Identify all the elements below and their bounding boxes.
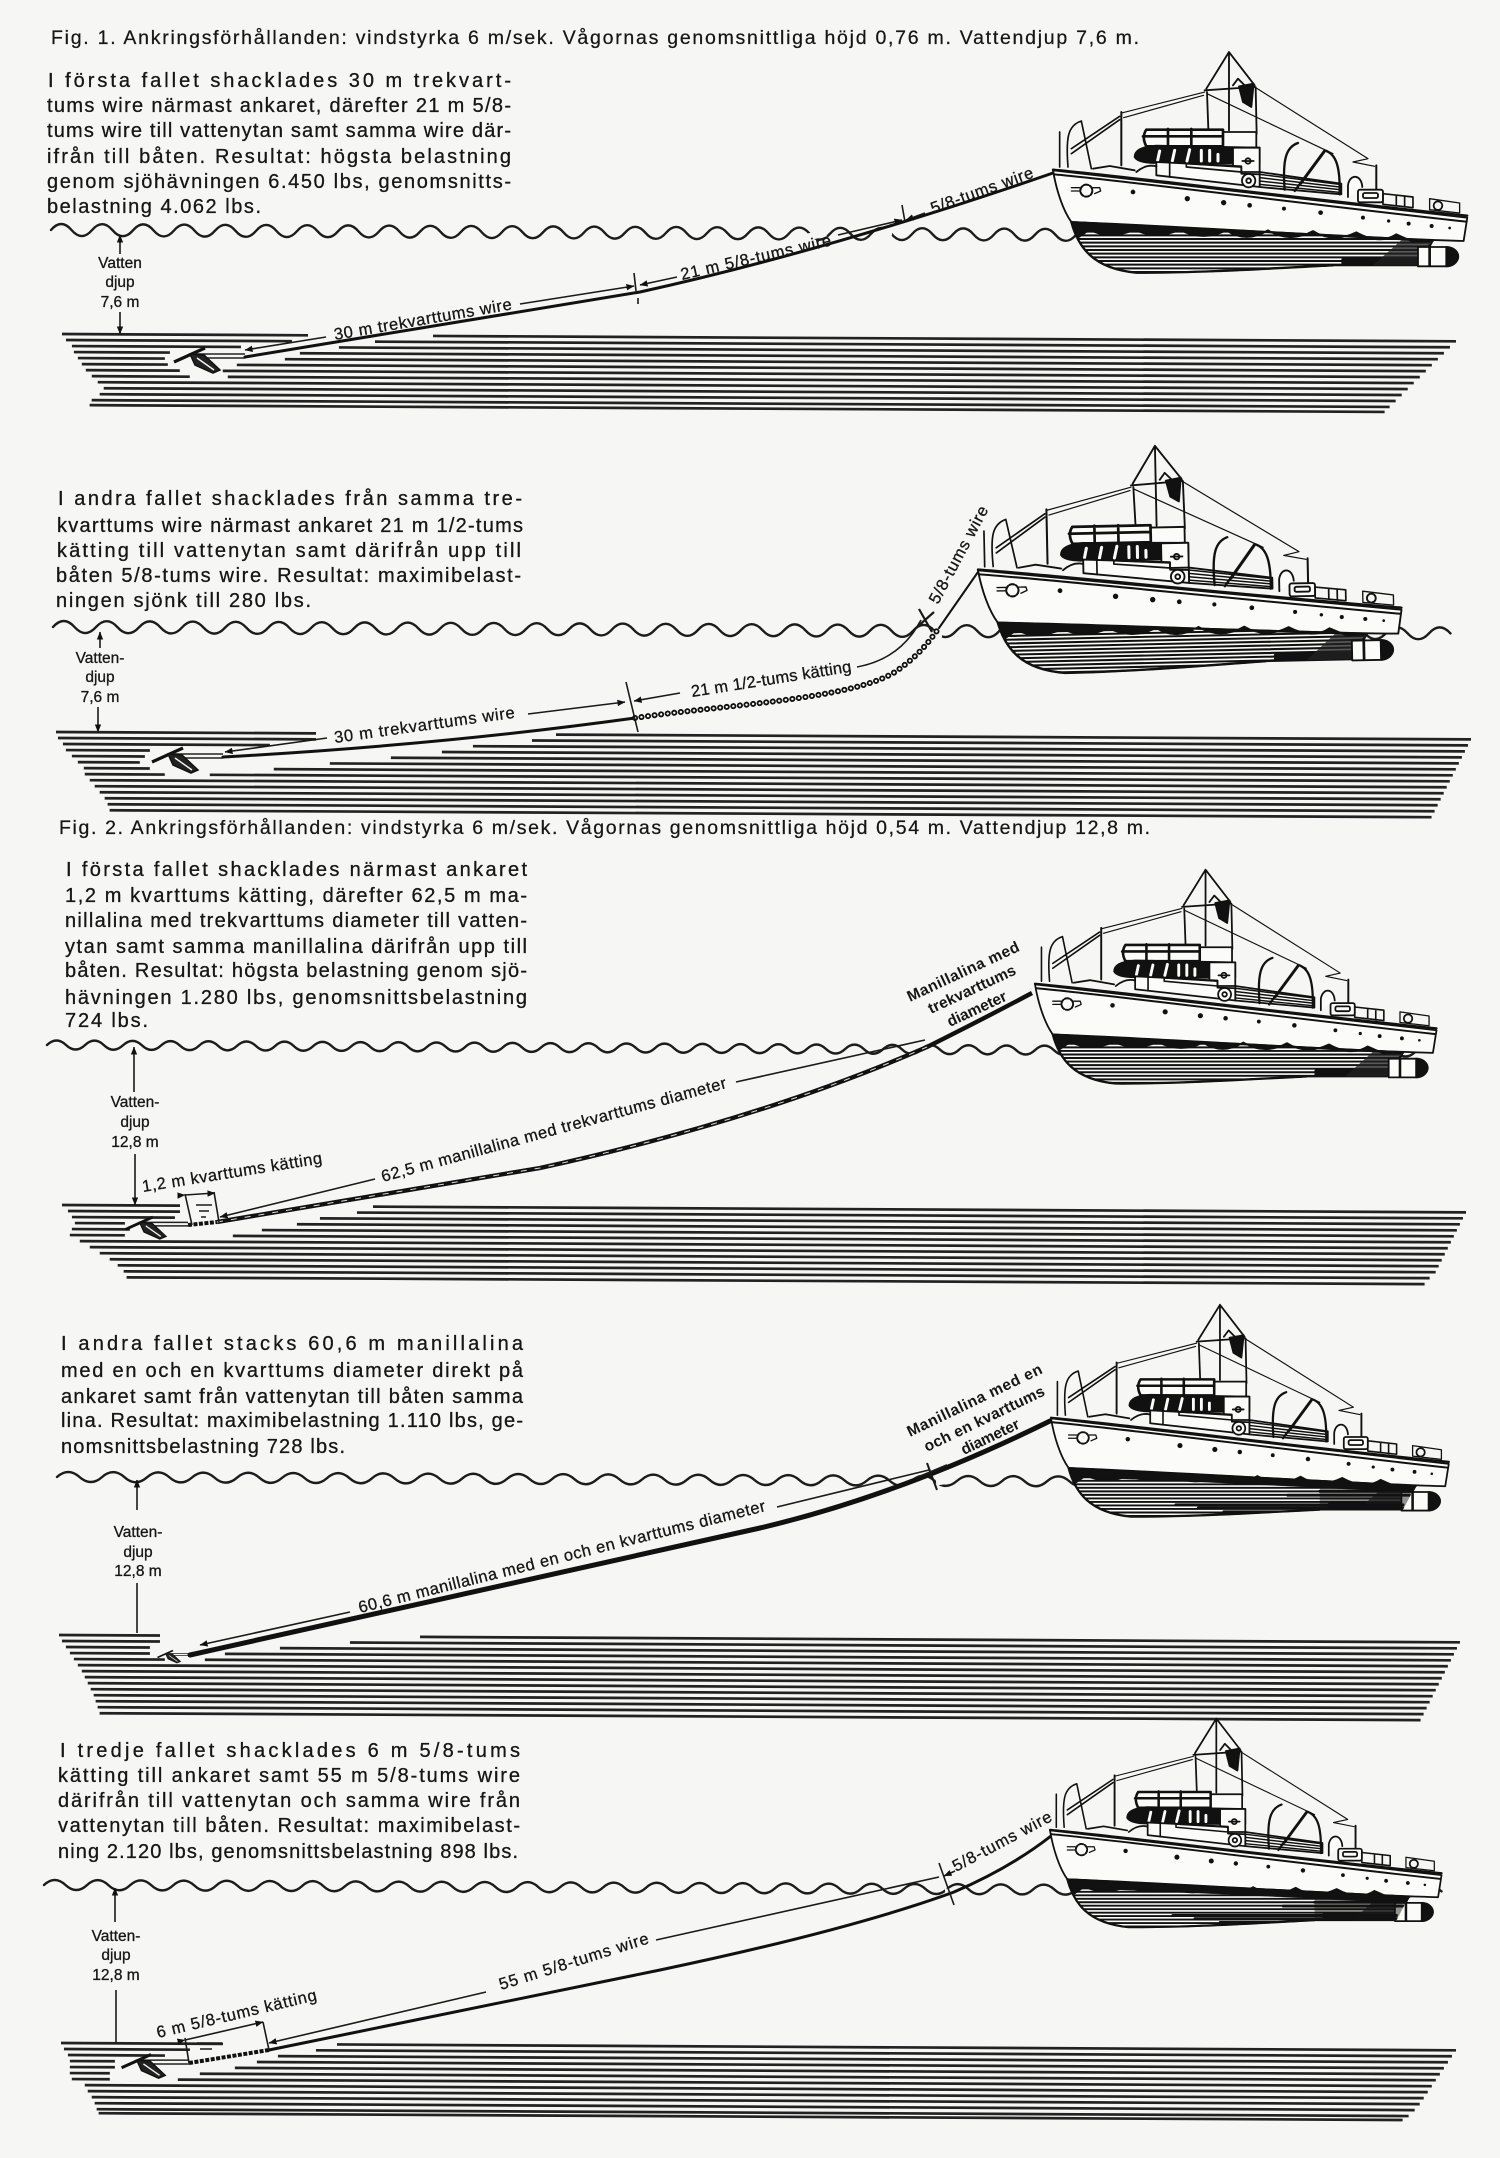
text block: case 1 description: 1,2 m kvarttums kätting, därefter 62,5 m ma-: [65, 885, 527, 907]
title: figure 1: Fig. 1. Ankringsförhållanden: vindstyrka 6 m/sek. Vågornas genomsnittliga höjd 0,76 m. Vattendjup 7,6 m.: [51, 27, 1139, 49]
water depth marker: 12,8 m: [114, 1563, 162, 1580]
text block: case 3 description: I tredje fallet shacklades 6 m 5/8-tums: [60, 1740, 520, 1762]
icon: boat: [975, 441, 1403, 675]
water depth marker: djup: [123, 1544, 153, 1561]
text block: case 2 description: nomsnittsbelastning 728 lbs.: [61, 1436, 345, 1458]
text block: case 2 description: kvarttums wire närmast ankaret 21 m 1/2-tums: [57, 515, 523, 537]
panel: figure 1 case 1: [47, 52, 1467, 412]
sea floor: [62, 1205, 1466, 1284]
sea surface wave: [44, 1880, 1442, 1896]
text block: case 2 description: ningen sjönk till 280 lbs.: [56, 590, 311, 612]
sea floor: [56, 732, 1471, 817]
text block: case 2 description: [61, 1333, 524, 1458]
rope labels: 30 m trekvarttums wire: [333, 704, 516, 747]
anchor: [174, 348, 245, 373]
wire to boat: [939, 572, 978, 628]
panel: figure 2 case 1: [47, 859, 1466, 1284]
rope labels: 5/8-tums wire: [949, 1808, 1055, 1876]
text block: case 2 description: I andra fallet shacklades från samma tre-: [58, 488, 522, 510]
water depth marker: djup: [85, 669, 115, 686]
rope labels: 1,2 m kvarttums kätting: [141, 1149, 323, 1196]
sea surface wave: [57, 1472, 1362, 1488]
water depth marker: Vatten-: [76, 650, 124, 667]
sea surface wave: [53, 621, 1450, 639]
text block: case 2 description: kätting till vattenytan samt därifrån upp till: [57, 540, 521, 562]
panel: figure 1 case 2: [53, 441, 1471, 817]
text block: case 3 description: vattenytan till båten. Resultat: maximibelast-: [58, 1815, 520, 1837]
text block: case 2 description: med en och en kvarttums diameter direkt på: [61, 1360, 524, 1382]
rope labels: 55 m 5/8-tums wire: [497, 1930, 651, 1994]
rope labels: 21 m 1/2-tums kätting: [690, 658, 853, 701]
short chain: [189, 2050, 269, 2063]
panel: figure 2 case 3: [44, 1719, 1456, 2120]
anchor line: [245, 173, 1053, 357]
text block: case 1 description: ifrån till båten. Resultat: högsta belastning: [47, 146, 511, 168]
water depth marker: [92, 1888, 140, 2043]
text block: case 3 description: [58, 1740, 520, 1863]
rope labels: [225, 503, 992, 752]
rope labels: 5/8-tums wire: [928, 164, 1036, 218]
text block: case 1 description: [65, 859, 527, 1032]
manilla line: [190, 1421, 1050, 1655]
text block: case 2 description: I andra fallet stacks 60,6 m manillalina: [61, 1333, 524, 1355]
water depth marker: 12,8 m: [92, 1967, 140, 1984]
text block: case 1 description: 724 lbs.: [65, 1010, 148, 1032]
anchor: [158, 1650, 193, 1663]
rope labels: 60,6 m manillalina med en och en kvarttums diameter: [357, 1497, 768, 1617]
text block: case 1 description: tums wire till vattenytan samt samma wire där-: [47, 120, 511, 142]
icon: boat: [1050, 1719, 1442, 1927]
icon: boat: [1053, 52, 1467, 273]
water depth marker: 12,8 m: [111, 1134, 159, 1151]
water depth marker: [98, 235, 142, 334]
sea surface wave: [51, 224, 1384, 242]
chain: [635, 628, 939, 718]
anchor: [152, 748, 223, 773]
sea floor: [62, 334, 1456, 412]
water depth marker: djup: [120, 1114, 150, 1131]
water depth marker: Vatten-: [92, 1928, 140, 1945]
water depth marker: [114, 1480, 162, 1633]
text block: case 2 description: [56, 488, 523, 612]
water depth marker: djup: [105, 274, 135, 291]
water depth marker: Vatten-: [111, 1094, 159, 1111]
text block: case 1 description: nillalina med trekvarttums diameter till vatten-: [65, 910, 527, 932]
text block: case 1 description: genom sjöhävningen 6.450 lbs, genomsnitts-: [47, 171, 511, 193]
anchor: [126, 1217, 188, 1239]
short chain: [188, 1222, 217, 1225]
panel: figure 2 case 2: [57, 1305, 1460, 1720]
icon: boat: [1035, 870, 1436, 1084]
sea surface wave: [47, 1040, 1415, 1057]
sea floor: [61, 2043, 1456, 2120]
rope labels: diameter: [958, 1416, 1023, 1459]
rope labels: diameter: [945, 988, 1010, 1031]
rope labels: 5/8-tums wire: [926, 503, 992, 607]
rope labels: 30 m trekvarttums wire: [333, 296, 513, 344]
text block: case 2 description: båten 5/8-tums wire. Resultat: maximibelast-: [56, 565, 521, 587]
rope labels: Manillalina med: [905, 939, 1022, 1006]
sea floor: [59, 1635, 1460, 1720]
text block: case 1 description: belastning 4.062 lbs.: [47, 196, 261, 218]
rope labels: 62,5 m manillalina med trekvarttums diameter: [379, 1074, 729, 1186]
water depth marker: [76, 632, 124, 732]
text block: case 1 description: tums wire närmast ankaret, därefter 21 m 5/8-: [47, 95, 511, 117]
anchor wire: [223, 718, 635, 757]
water depth marker: Vatten-: [114, 1524, 162, 1541]
text block: case 2 description: lina. Resultat: maximibelastning 1.110 lbs, ge-: [61, 1410, 523, 1432]
wire: [269, 1836, 1051, 2050]
text block: case 1 description: båten. Resultat: högsta belastning genom sjö-: [65, 960, 527, 982]
text block: case 1 description: I första fallet shacklades närmast ankaret: [66, 859, 527, 881]
text block: case 2 description: ankaret samt från vattenytan till båten samma: [61, 1386, 524, 1408]
text block: case 1 description: ytan samt samma manillalina därifrån upp till: [65, 936, 527, 958]
water depth marker: Vatten: [98, 255, 142, 272]
icon: boat: [1051, 1305, 1449, 1517]
text block: case 3 description: kätting till ankaret samt 55 m 5/8-tums wire: [58, 1765, 520, 1787]
rope labels: [245, 164, 1036, 350]
text block: case 1 description: [47, 70, 511, 218]
rope labels: 6 m 5/8-tums kätting: [155, 1986, 318, 2042]
rope labels: trekvarttums: [926, 962, 1019, 1018]
text block: case 1 description: hävningen 1.280 lbs, genomsnittsbelastning: [65, 987, 527, 1009]
text block: case 3 description: därifrån till vattenytan och samma wire från: [58, 1790, 520, 1812]
rope labels: [155, 1808, 1055, 2063]
text block: case 3 description: ning 2.120 lbs, genomsnittsbelastning 898 lbs.: [58, 1841, 518, 1863]
rope labels: [200, 1361, 1048, 1645]
water depth marker: [111, 1047, 159, 1205]
water depth marker: djup: [101, 1947, 131, 1964]
text block: case 1 description: I första fallet shacklades 30 m trekvart-: [48, 70, 511, 92]
rope labels: [141, 939, 1022, 1225]
water depth marker: 7,6 m: [101, 294, 139, 311]
rope labels: Manillalina med en: [904, 1361, 1045, 1441]
anchor: [122, 2054, 189, 2078]
title: figure 2: Fig. 2. Ankringsförhållanden: vindstyrka 6 m/sek. Vågornas genomsnittliga höjd 0,54 m. Vattendjup 12,8 m.: [59, 817, 1150, 839]
water depth marker: 7,6 m: [81, 689, 119, 706]
rope labels: och en kvarttums: [921, 1383, 1048, 1456]
manilla line: [217, 993, 1032, 1222]
rope labels: 21 m 5/8-tums wire: [679, 232, 833, 284]
